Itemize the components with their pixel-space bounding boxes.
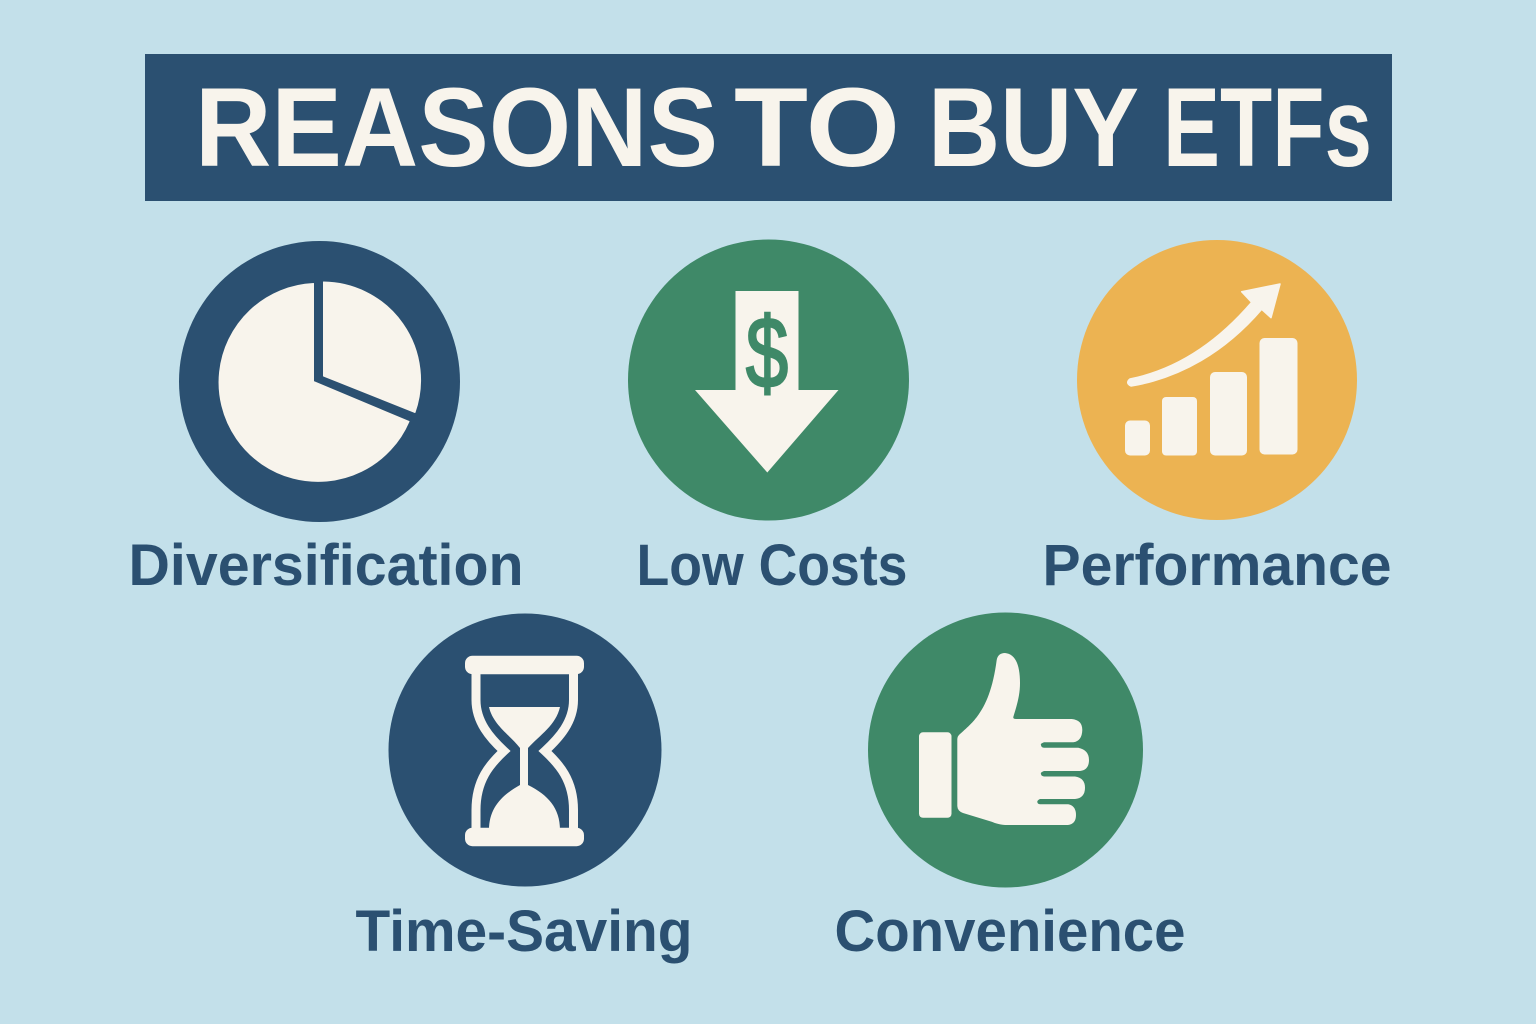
icon: thumbs up [868, 612, 1143, 888]
label: low costs: Low Costs [636, 533, 908, 598]
icon: low costs down arrow: $ [746, 297, 788, 408]
icon: hourglass [388, 614, 662, 886]
title: TO [734, 65, 900, 190]
label: time-saving: Time-Saving [356, 899, 692, 964]
icon: diversification pie chart [179, 241, 460, 522]
title: BUY [928, 65, 1139, 190]
icon: low costs down arrow [628, 240, 909, 520]
icon: performance bar chart [1077, 240, 1357, 520]
label: convenience: Convenience [834, 899, 1186, 964]
label: diversification: Diversification [128, 533, 524, 598]
label: performance: Performance [1042, 533, 1392, 598]
title: REASONS [195, 65, 718, 190]
title [145, 54, 1392, 201]
title: ETFs [1163, 65, 1372, 190]
